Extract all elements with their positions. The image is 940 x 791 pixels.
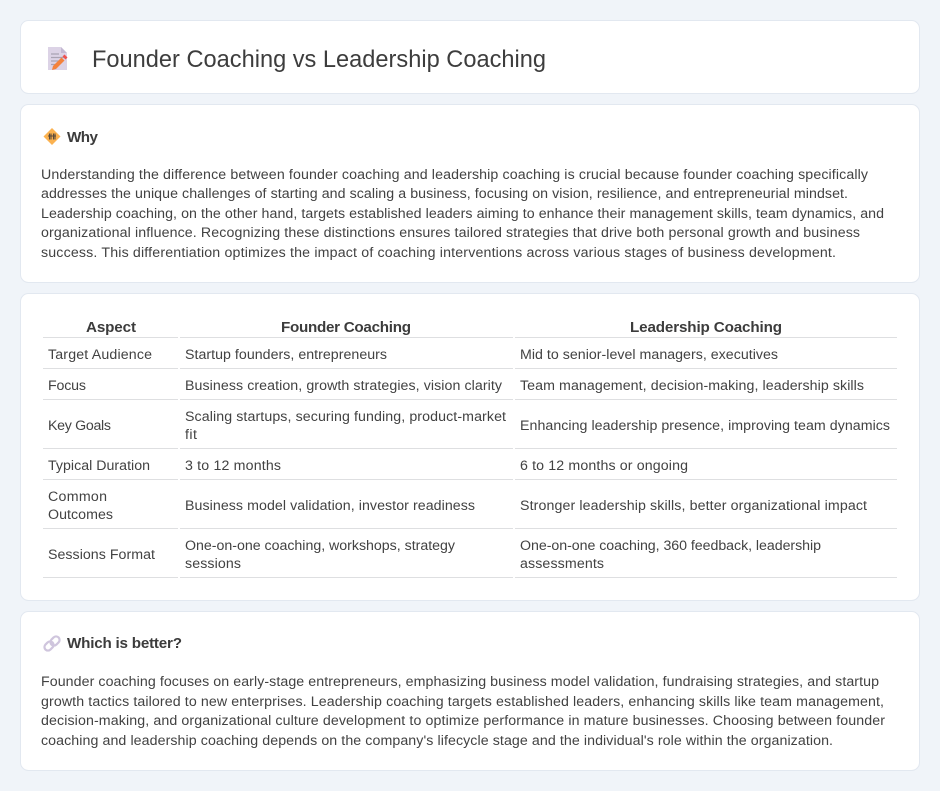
text block: which is better explanation: Founder coaching focuses on early-stage entrepreneurs, emphasizing business model validation, fundraising strategies, and startup [41,674,879,690]
row: target audience: Mid to senior-level managers, executives [520,347,778,363]
panel: which is better [20,612,920,770]
row: key goals: Key Goals [48,418,111,434]
text block: which is better explanation: growth tactics tailored to new enterprises. Leadership coaching targets established leaders, enhancing skills like team management, [41,694,884,710]
header panel [20,20,920,94]
row: key goals: Enhancing leadership presence, improving team dynamics [520,418,890,434]
row: key goals [43,409,897,449]
row: focus [43,378,897,400]
text block: which is better explanation: coaching and leadership coaching depends on the company's lifecycle stage and the individual's role within the organization. [41,733,833,749]
icon: chain link [43,635,61,652]
row: common outcomes: Outcomes [48,507,113,523]
row: target audience: Target Audience [48,347,152,363]
row: sessions format: One-on-one coaching, workshops, strategy [185,538,456,554]
text block: why explanation: organizational influence. Recognizing these distinctions ensures tailored strategies that drive both personal growth and business [41,225,860,241]
row: typical duration: Typical Duration [48,458,150,474]
text block: why explanation: addresses the unique challenges of starting and scaling a business, focusing on vision, resilience, and entrepreneurial mindset. [41,186,848,202]
row: focus: Business creation, growth strategies, vision clarity [185,378,503,394]
text block: why explanation: success. This differentiation optimizes the impact of coaching interventions across various stages of business development. [41,245,836,261]
row: key goals: Scaling startups, securing funding, product-market [185,409,506,425]
icon: memo with pencil [48,47,68,70]
text block: why explanation: Understanding the difference between founder coaching and leadership coaching is crucial because founder coaching specifically [41,167,869,183]
row: sessions format: Sessions Format [48,547,155,563]
row: target audience [43,347,897,369]
text block: why explanation: Leadership coaching, on the other hand, targets established leaders aiming to enhance their management skills, team dynamics, and [41,206,884,222]
heading: why: Why [67,129,99,146]
row: sessions format: assessments [520,556,604,572]
icon: orange diamond [44,128,60,145]
table header row [43,319,897,338]
row: sessions format: sessions [185,556,241,572]
row: common outcomes: Common [48,489,107,505]
row: sessions format [43,538,897,578]
text block: why explanation [41,167,884,261]
row: key goals: fit [185,427,197,443]
table header row: Founder Coaching [281,319,411,336]
text block: which is better explanation: decision-making, and organizational culture development to optimize performance in mature businesses. Choosing between founder [41,713,885,729]
row: common outcomes: Business model validation, investor readiness [185,498,475,514]
table header row: Aspect [86,319,136,336]
panel: why [20,104,920,282]
table header row: Leadership Coaching [630,319,782,336]
row: typical duration [43,458,897,480]
row: focus: Team management, decision-making, leadership skills [520,378,864,394]
row: typical duration: 3 to 12 months [185,458,281,474]
text block: which is better explanation [41,674,885,749]
row: focus: Focus [48,378,86,394]
row: common outcomes: Stronger leadership skills, better organizational impact [520,498,867,514]
heading: which is better: Which is better? [67,635,182,652]
title: Founder Coaching vs Leadership Coaching [92,47,546,73]
row: sessions format: One-on-one coaching, 360 feedback, leadership [520,538,821,554]
panel: comparison table [20,294,920,600]
row: common outcomes [43,489,897,529]
row: target audience: Startup founders, entrepreneurs [185,347,387,363]
row: typical duration: 6 to 12 months or ongoing [520,458,688,474]
